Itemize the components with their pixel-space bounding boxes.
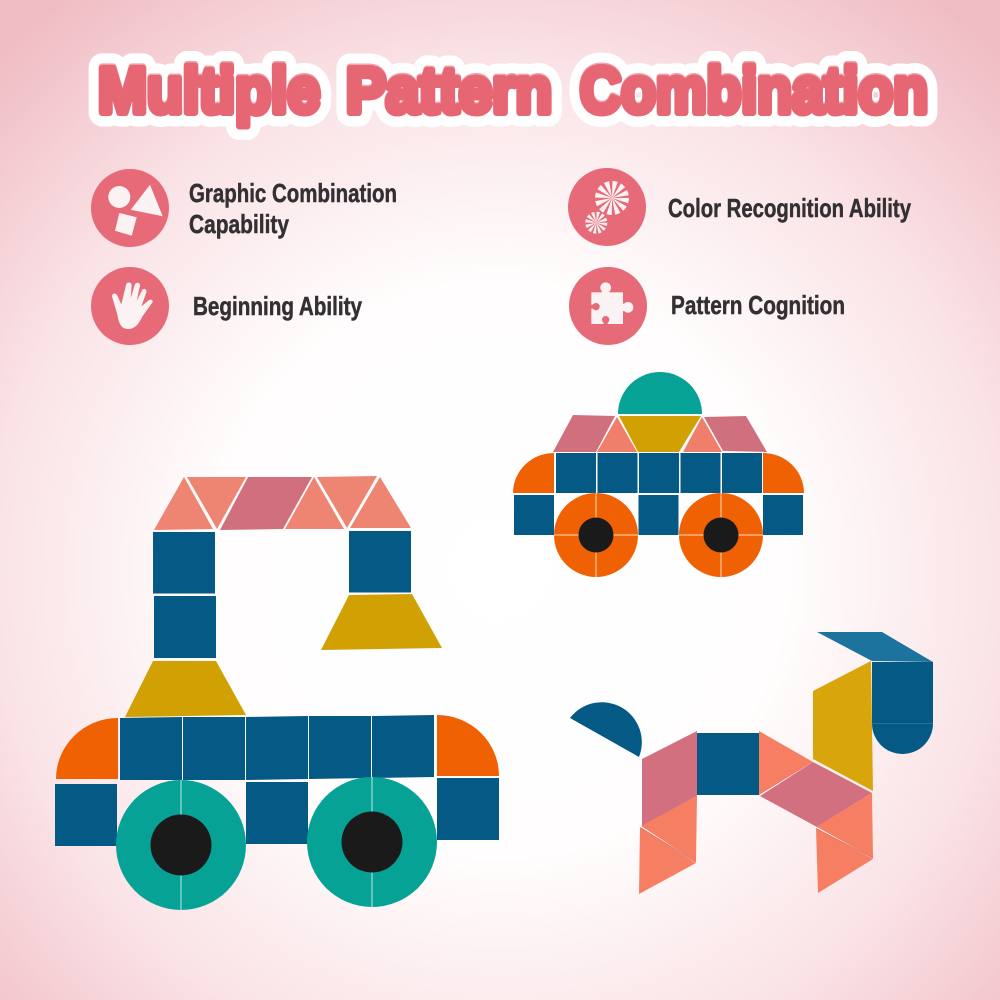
horse <box>570 632 933 894</box>
text: beginning ability: Beginning Ability <box>193 291 362 321</box>
crane truck <box>55 476 499 910</box>
rear <box>759 731 873 893</box>
roof pieces <box>154 476 411 530</box>
text: graphic combination capability <box>189 178 397 239</box>
text: graphic combination capability: Capability <box>189 209 289 239</box>
title: Pattern <box>346 53 552 125</box>
title <box>98 53 928 126</box>
fenders <box>56 715 499 779</box>
dome <box>618 372 702 414</box>
tail <box>570 702 642 757</box>
title: Pattern <box>346 54 552 126</box>
icon: puzzle <box>569 267 647 345</box>
title: Multiple <box>98 53 320 125</box>
text: color recognition ability: Color Recognition Ability <box>668 193 911 223</box>
wheels <box>554 493 763 577</box>
wheels <box>116 777 437 910</box>
title: Pattern <box>346 54 552 126</box>
title: Combination <box>580 53 928 125</box>
yellow trapezoids <box>125 594 442 717</box>
title: Combination <box>580 54 928 126</box>
column blocks <box>153 531 411 658</box>
text: graphic combination capability: Graphic Combination <box>189 178 397 208</box>
icon: hand <box>91 267 169 345</box>
title: Multiple <box>98 54 320 126</box>
title: Multiple <box>98 54 320 126</box>
front leg <box>639 731 697 894</box>
body blocks <box>55 715 499 846</box>
body blocks <box>514 453 803 535</box>
neck <box>813 661 873 791</box>
roof <box>553 415 767 452</box>
title: Combination <box>580 54 928 126</box>
small car <box>513 372 804 577</box>
icon: flowers <box>568 168 646 246</box>
text: pattern cognition: Pattern Cognition <box>671 290 845 320</box>
fenders <box>513 453 804 493</box>
body block <box>697 733 759 795</box>
icon: shapes <box>91 169 169 247</box>
head <box>817 632 933 754</box>
